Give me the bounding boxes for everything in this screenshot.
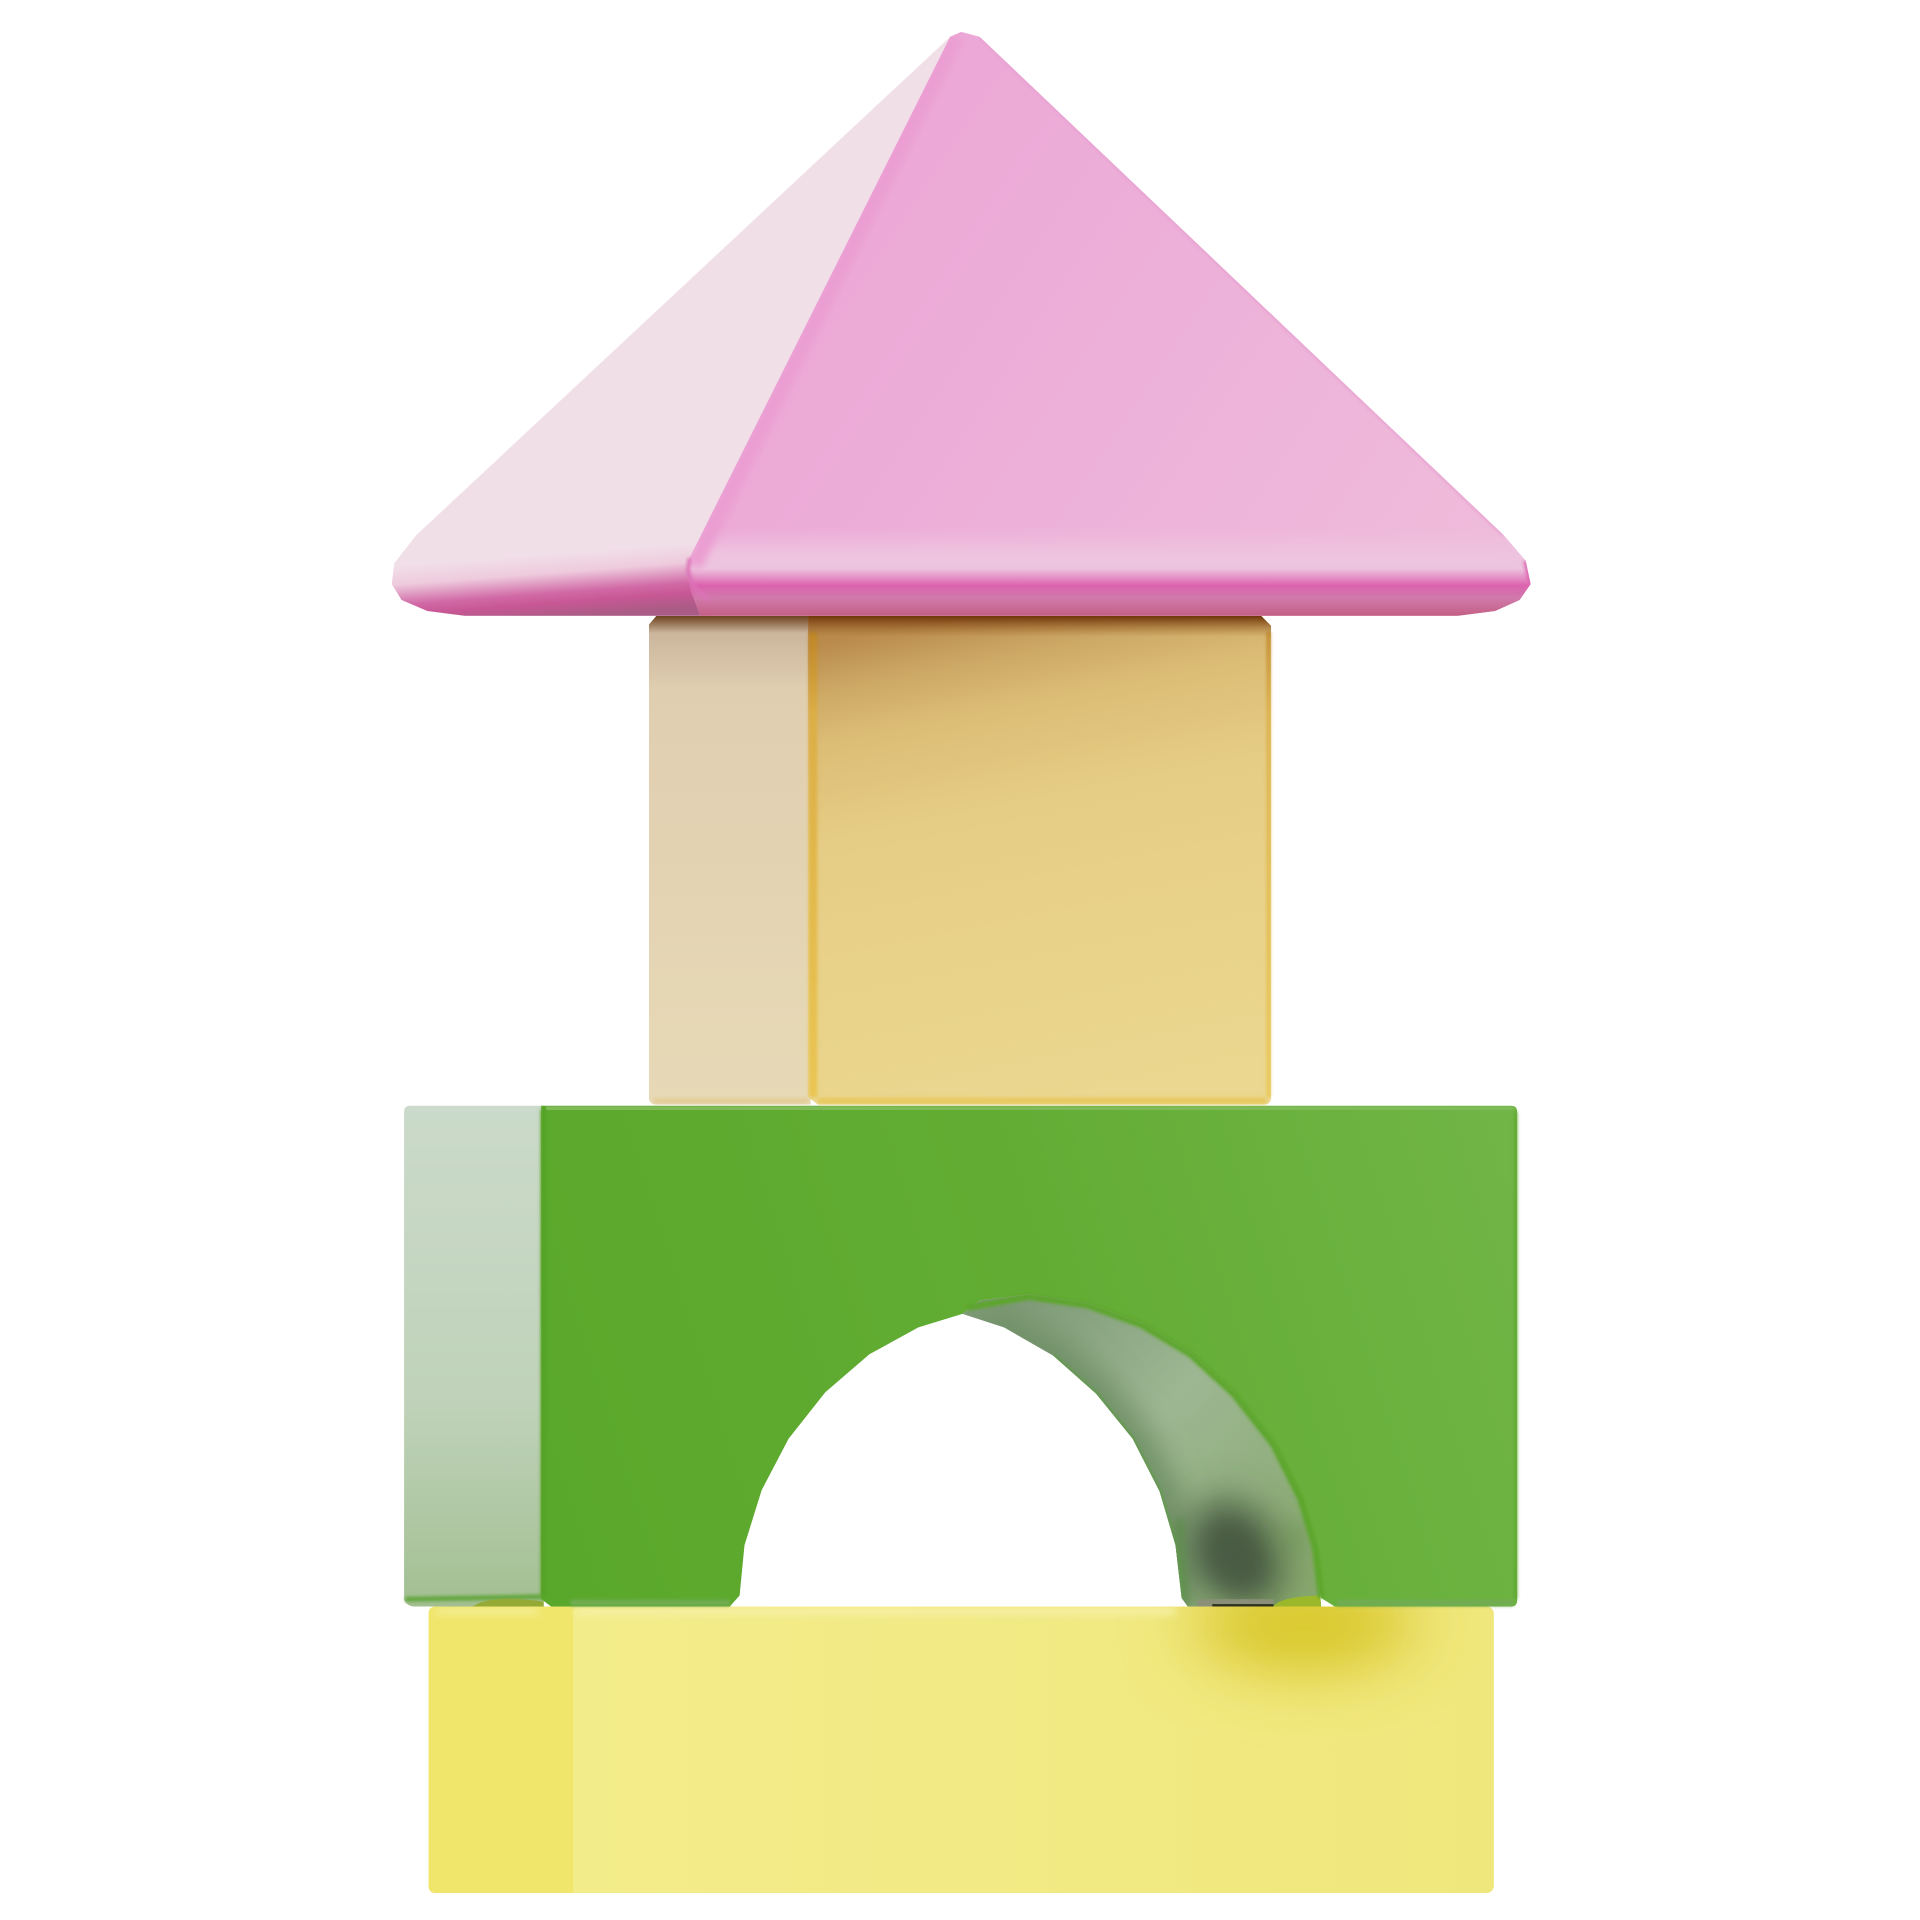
green arch front face [541,1106,1517,1607]
block: pink roof [367,24,1555,624]
green arch inner surface [962,1294,1322,1606]
roof ridge fold [688,558,710,600]
block: yellow cube [649,616,1271,1104]
green arch top edge highlight [546,1107,1513,1110]
green arch rim [967,1297,1321,1598]
cube front face [808,616,1271,1104]
block: yellow base [428,1606,1494,1893]
yellow base left face [429,1607,573,1893]
green arch left face [404,1106,544,1607]
roof left face [392,37,950,616]
roof right face [661,24,1555,624]
yellow base cast shadow [436,1571,1420,1674]
block: green arch [404,1106,1517,1621]
illustration: stacked toy blocks [392,32,1531,1893]
cube top shadow [808,616,1271,637]
cube left face [649,616,811,1104]
